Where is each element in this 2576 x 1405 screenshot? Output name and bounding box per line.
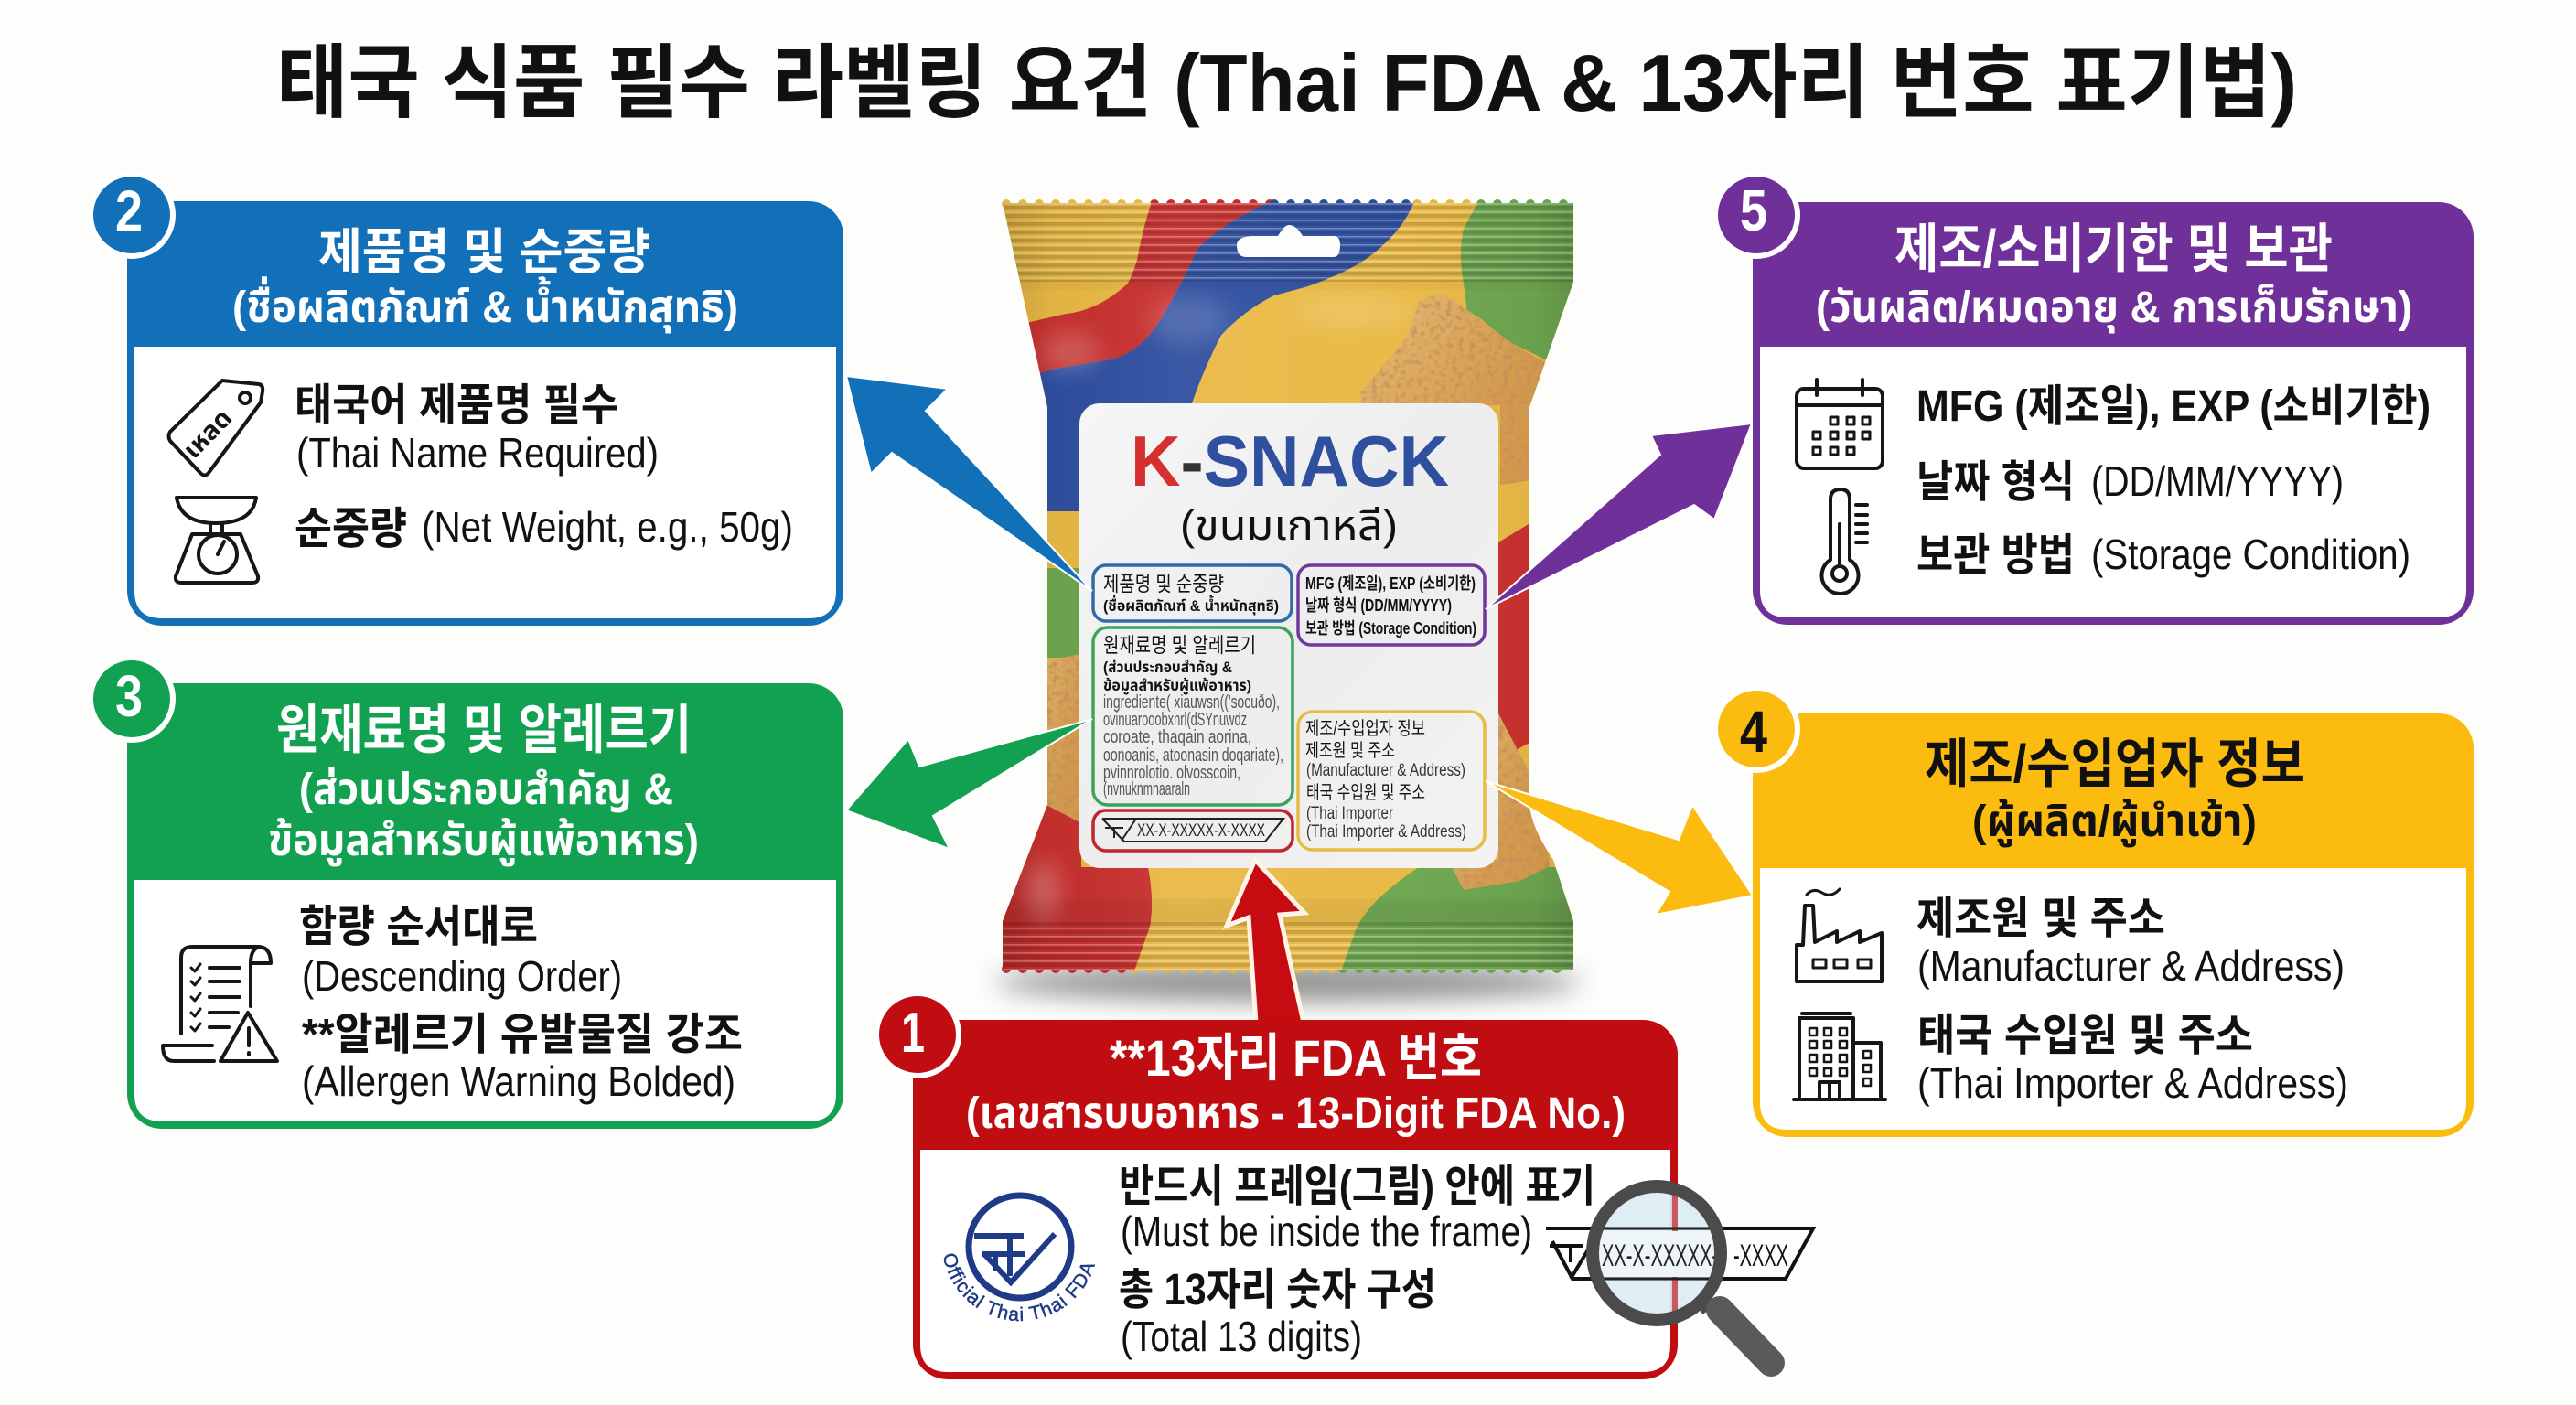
panel 5 heading: 제조/소비기한 및 보관 xyxy=(1894,220,2333,279)
panel 1 text: (Total 13 digits) xyxy=(1121,1313,1362,1360)
brand name: K-SNACK xyxy=(1131,421,1449,501)
panel 2 text: 순중량 xyxy=(295,505,407,553)
pack box: fda number: XX-X-XXXXX-X-XXXX xyxy=(1137,821,1265,841)
number badge 2 xyxy=(91,174,173,256)
panel 5 heading: (วันผลิต/หมดอายุ & การเก็บรักษา) xyxy=(1816,284,2412,334)
icon: ingredient list with warning xyxy=(163,947,277,1061)
pack box: ingredients: pvinnrolotio. olvosscoin, xyxy=(1103,763,1240,783)
panel 1 heading xyxy=(966,1029,1626,1138)
pack box: manufacturer xyxy=(1298,712,1485,850)
icon: scale xyxy=(176,498,258,583)
bag crimp edges xyxy=(1006,204,1573,969)
icon: thai fda logo xyxy=(944,1193,1096,1321)
icon: thai price tag: เหลด xyxy=(177,403,237,464)
panel 3 heading: 원재료명 및 알레르기 xyxy=(276,701,692,760)
panel 3 heading xyxy=(268,701,699,867)
fda number frame with magnifier: -XXXX xyxy=(1733,1239,1788,1273)
pack box: fda number xyxy=(1093,810,1293,851)
panel 1: 13-digit fda number xyxy=(879,996,1817,1379)
panel 4 heading: (ผู้ผลิต/ผู้นำเข้า) xyxy=(1972,798,2257,848)
number badge 2: 2 xyxy=(115,178,143,244)
panel 5 text: 날짜 형식 xyxy=(1916,458,2075,507)
pack box: manufacturer: 제조원 및 주소 xyxy=(1305,740,1395,761)
icon: factory xyxy=(1797,889,1882,981)
panel 3 text: **알레르기 유발물질 강조 xyxy=(302,1011,743,1059)
arrow: panel 3 xyxy=(846,719,1092,849)
snack bag xyxy=(995,197,1583,1001)
panel 4 text: (Manufacturer & Address) xyxy=(1917,942,2345,990)
fda number frame with magnifier xyxy=(1546,1186,1813,1363)
panel 2 heading: 제품명 및 순중량 xyxy=(318,225,650,280)
panel 4 text: (Thai Importer & Address) xyxy=(1917,1059,2348,1107)
panel 1 text: 반드시 프레임(그림) 안에 표기 xyxy=(1119,1163,1595,1211)
icon: office building xyxy=(1794,1014,1885,1099)
panel 2 heading xyxy=(232,225,738,334)
panel 4 heading xyxy=(1925,735,2305,848)
panel 5 text: MFG (제조일), EXP (소비기한) xyxy=(1916,382,2431,431)
panel 3 heading: (ส่วนประกอบสำคัญ & xyxy=(299,766,673,814)
panel 1 text: (Must be inside the frame) xyxy=(1121,1207,1532,1255)
panel 4 text xyxy=(1916,895,2348,1107)
icon: thermometer xyxy=(1822,489,1867,594)
thai brand name: (ขนมเกาหลี) xyxy=(1180,501,1398,549)
arrow: panel 1 xyxy=(1227,860,1304,1023)
panel 2 text: (Thai Name Required) xyxy=(296,429,659,477)
title: 태국 식품 필수 라벨링 요건 (Thai FDA & 13자리 번호 표기법) xyxy=(276,38,2297,128)
panel 2 text: 태국어 제품명 필수 xyxy=(295,381,618,430)
panel 5: dates and storage xyxy=(1715,174,2474,625)
number badge 5: 5 xyxy=(1740,177,1767,243)
panel 1 text xyxy=(1119,1163,1595,1360)
fda number frame with magnifier: XX-X-XXXXX- xyxy=(1602,1239,1718,1273)
icon: thai price tag xyxy=(168,381,263,476)
panel 3 heading: ข้อมูลสำหรับผู้แพ้อาหาร) xyxy=(268,817,699,867)
panel 3 text: (Allergen Warning Bolded) xyxy=(302,1057,735,1105)
panel 2: product name and net weight xyxy=(91,174,843,626)
pack box: ingredients: ข้อมูลสำหรับผู้แพ้อาหาร) xyxy=(1103,677,1251,695)
panel 5 text: (Storage Condition) xyxy=(2091,531,2410,578)
arrow: panel 4 xyxy=(1486,781,1753,915)
pack box: name: (ชื่อผลิตภัณฑ์ & น้ำหนักสุทธิ) xyxy=(1103,595,1279,616)
pack box: dates: 보관 방법 (Storage Condition) xyxy=(1305,619,1476,638)
pack box: manufacturer: 제조/수입업자 정보 xyxy=(1305,718,1425,739)
chips xyxy=(1359,295,1551,485)
panel 5 text: 보관 방법 xyxy=(1916,531,2075,580)
panel 5 text: (DD/MM/YYYY) xyxy=(2091,457,2344,505)
pack box: manufacturer: 태국 수입원 및 주소 xyxy=(1306,782,1425,803)
pack box: dates: 날짜 형식 (DD/MM/YYYY) xyxy=(1305,596,1452,615)
panel 1 text: 총 13자리 숫자 구성 xyxy=(1119,1266,1436,1314)
gloss xyxy=(1041,332,1100,372)
panel 1 heading: **13자리 FDA 번호 xyxy=(1110,1029,1482,1087)
arrow: panel 5 xyxy=(1486,424,1752,609)
panel 3 text: 함량 순서대로 xyxy=(299,903,538,951)
pack box: ingredients xyxy=(1093,627,1293,805)
panel 3: ingredients and allergens xyxy=(91,658,843,1129)
panel 5 heading xyxy=(1816,220,2412,334)
pack box: manufacturer: (Thai Importer xyxy=(1306,804,1394,823)
number badge 1 xyxy=(876,993,959,1076)
panel 5 text xyxy=(1916,382,2431,580)
hang hole xyxy=(1237,225,1340,257)
icon: thai fda logo: Official Thai Thai FDA xyxy=(944,1253,1096,1321)
panel 1 heading: (เลขสารบบอาหาร - 13-Digit FDA No.) xyxy=(966,1089,1626,1138)
bag bottom colours xyxy=(997,803,1152,979)
pack label xyxy=(1079,403,1498,868)
number badge 1: 1 xyxy=(901,1002,925,1065)
panel 3 text xyxy=(299,903,743,1105)
number badge 3 xyxy=(91,658,173,740)
number badge 5 xyxy=(1715,174,1798,256)
panel 4 text: 제조원 및 주소 xyxy=(1916,895,2165,943)
panel 2 text xyxy=(295,381,793,553)
pack box: ingredients: ovinuarooobxnrl(dSYnuwdz xyxy=(1103,710,1247,730)
number badge 4: 4 xyxy=(1740,699,1767,765)
icon: calendar xyxy=(1797,380,1883,468)
pack box: ingredients: (ส่วนประกอบสำคัญ & xyxy=(1103,658,1232,676)
panel 2 text: (Net Weight, e.g., 50g) xyxy=(422,503,793,551)
number badge 3: 3 xyxy=(115,663,143,729)
pack box: ingredients: ingrediente( xiauwsn(('socuðo), xyxy=(1103,692,1280,713)
pack box: manufacturer: (Manufacturer & Address) xyxy=(1306,761,1465,780)
panel 3 text: (Descending Order) xyxy=(302,952,622,1000)
pack box: manufacturer: (Thai Importer & Address) xyxy=(1306,822,1466,842)
pack box: dates: MFG (제조일), EXP (소비기한) xyxy=(1305,574,1476,593)
pack box: ingredients: oonoanis, atoonasin doqariate), xyxy=(1103,745,1283,766)
number badge 4 xyxy=(1715,688,1798,770)
pack box: name: 제품명 및 순중량 xyxy=(1103,572,1224,595)
panel 4: manufacturer and importer xyxy=(1715,688,2474,1137)
panel 2 heading: (ชื่อผลิตภัณฑ์ & น้ำหนักสุทธิ) xyxy=(232,276,738,334)
panel 4 heading: 제조/수입업자 정보 xyxy=(1925,735,2305,794)
pack box: ingredients: 원재료명 및 알레르기 xyxy=(1103,633,1256,657)
arrow: panel 2 xyxy=(846,376,1092,591)
pack box: dates xyxy=(1298,565,1485,645)
pack box: name xyxy=(1093,565,1292,621)
pack box: ingredients: (nvnuknmnaaraln xyxy=(1103,779,1190,799)
pack box: ingredients: coroate, thaqain aorina, xyxy=(1103,727,1251,747)
panel 4 text: 태국 수입원 및 주소 xyxy=(1917,1012,2253,1060)
